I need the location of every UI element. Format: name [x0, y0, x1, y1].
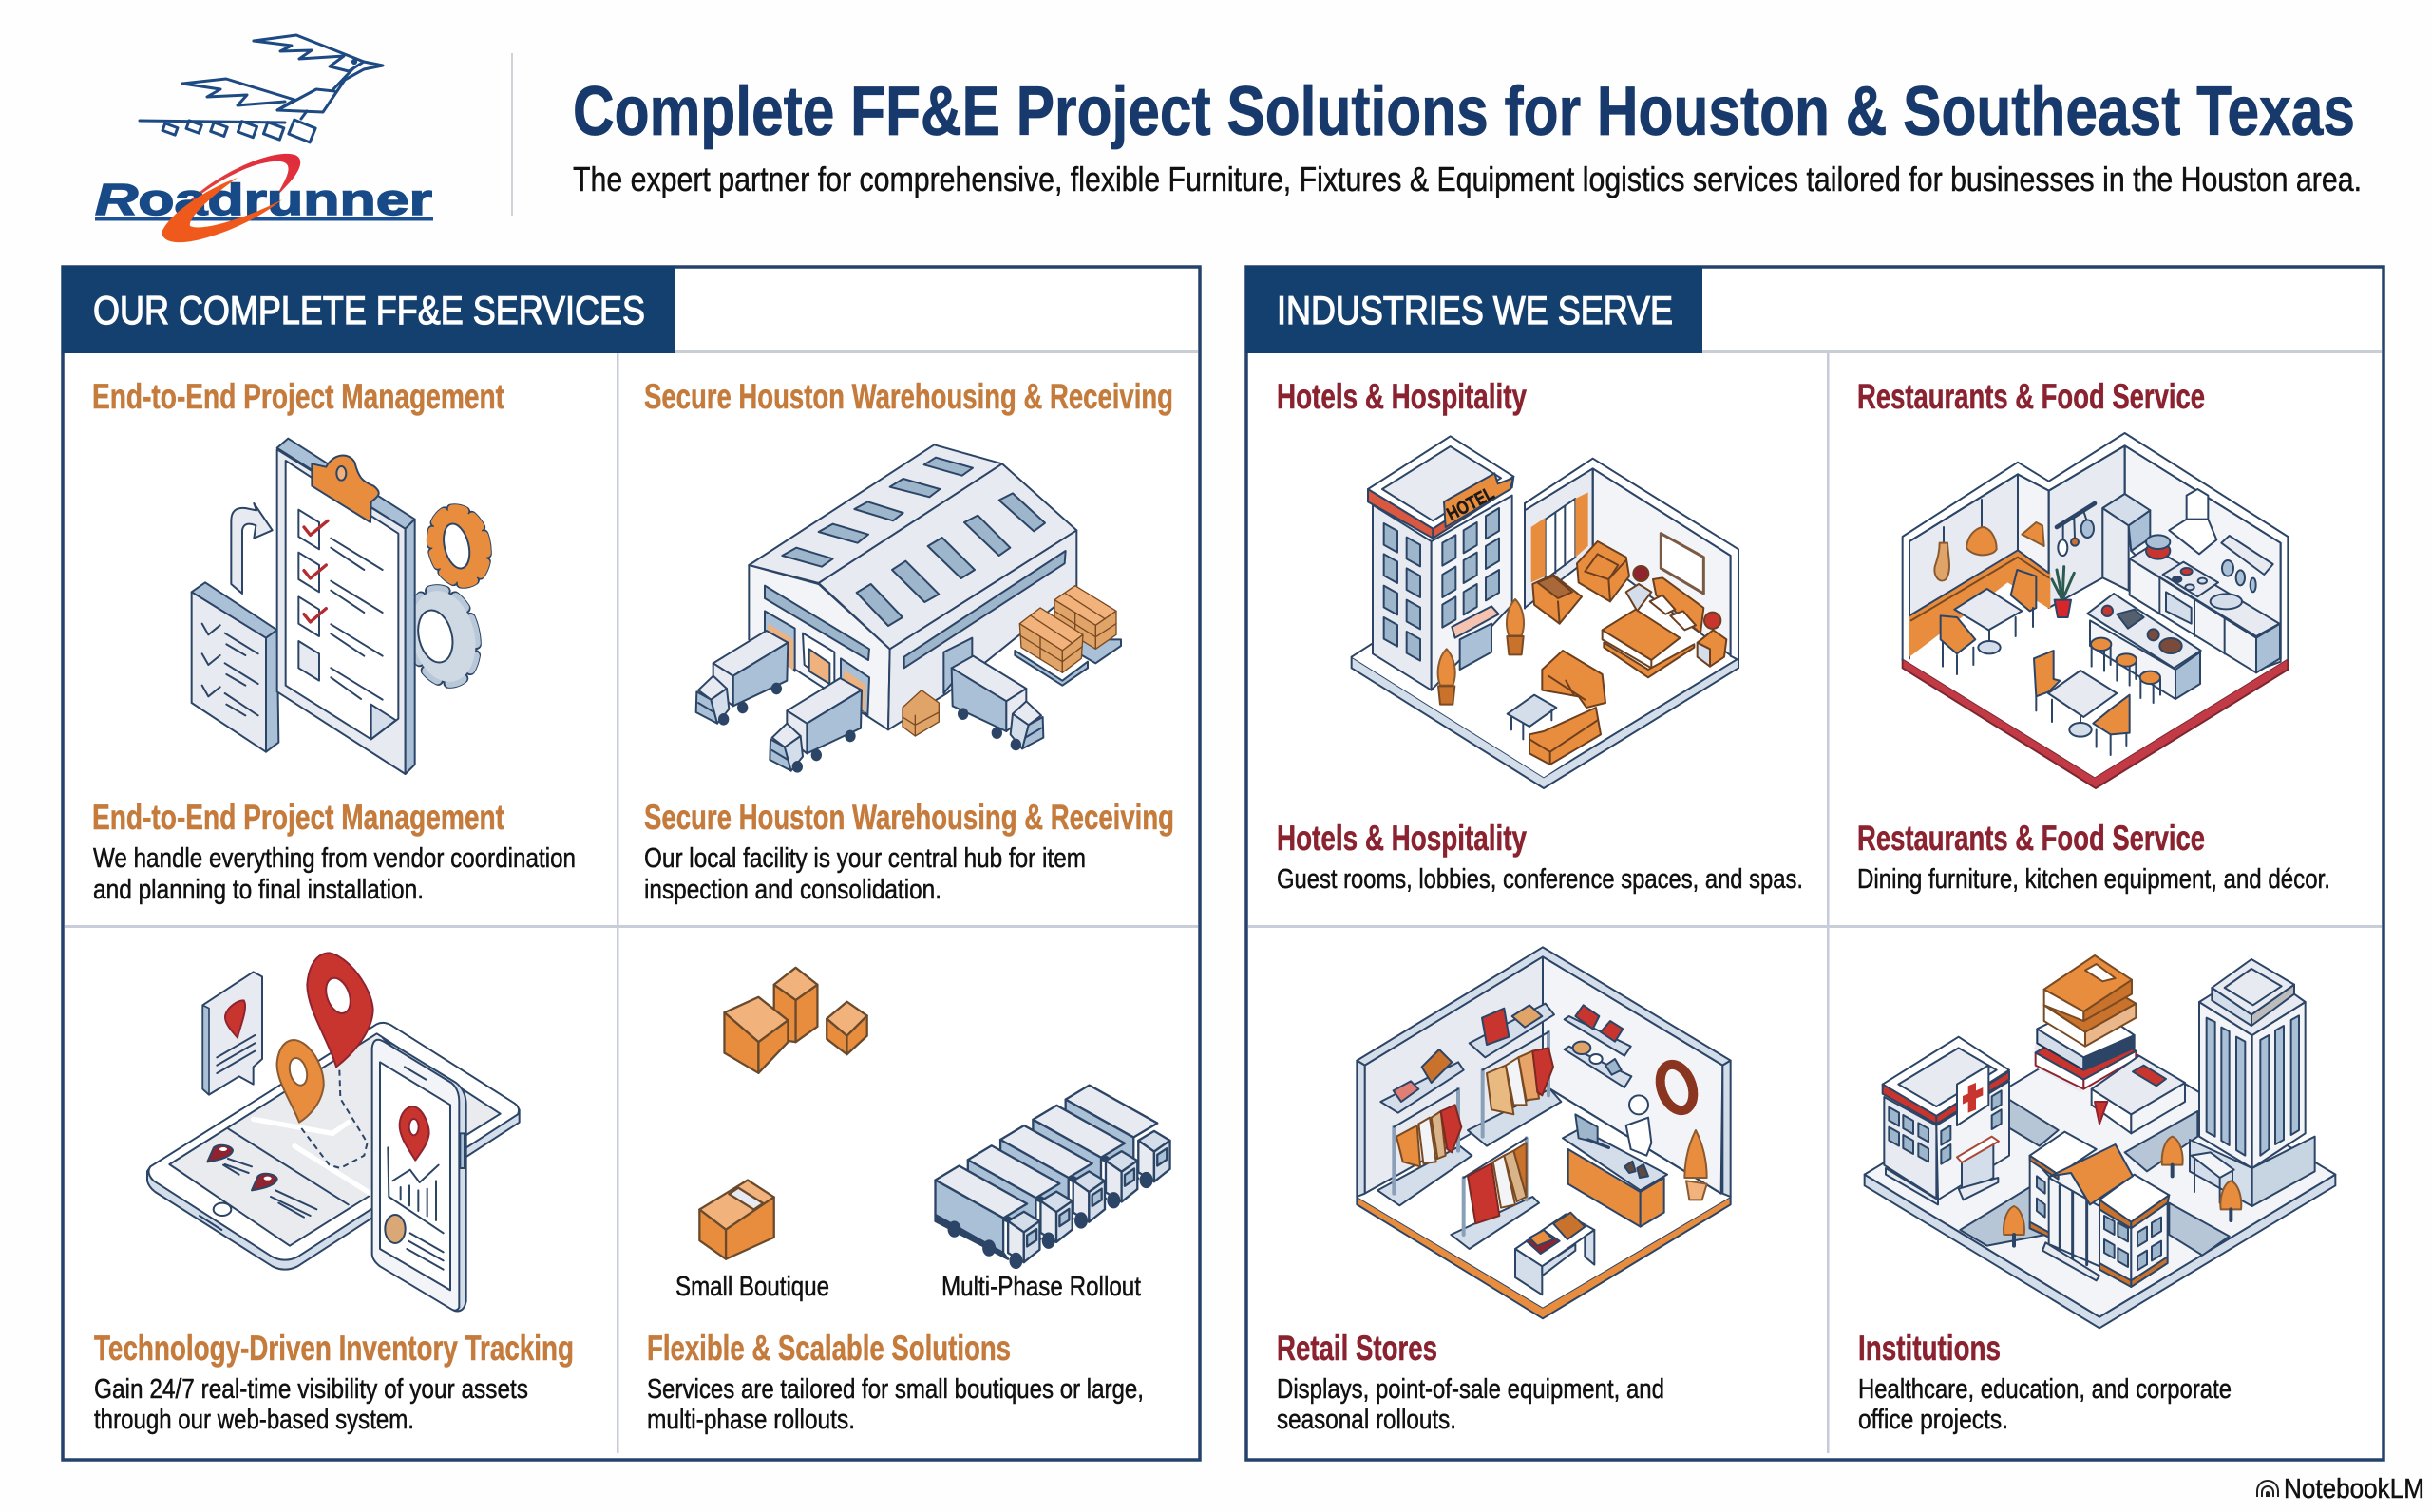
panel header tab [62, 266, 675, 353]
panel: our complete FF&E services [62, 266, 1200, 1460]
description: multi-phase rollouts. [647, 1405, 855, 1435]
industry: institutions [1858, 955, 2335, 1435]
label: hotel sign: HOTEL [1444, 483, 1498, 525]
service: flexible and scalable solutions [647, 968, 1170, 1435]
description [644, 798, 1174, 905]
service: end-to-end project management [92, 377, 576, 905]
NotebookLM watermark [2257, 1474, 2424, 1504]
description: Healthcare, education, and corporate [1858, 1374, 2232, 1405]
label: small boutique: Small Boutique [675, 1272, 829, 1302]
icon: clipboard, checklist and gears [192, 439, 494, 774]
icon: warehouse with trucks [696, 444, 1121, 772]
description: through our web-based system. [94, 1405, 414, 1435]
heading: End-to-End Project Management [92, 377, 504, 416]
label: multi-phase rollout: Multi-Phase Rollout [941, 1272, 1141, 1302]
description: Displays, point-of-sale equipment, and [1277, 1374, 1664, 1405]
description: End-to-End Project Management [92, 798, 504, 837]
description: We handle everything from vendor coordination [93, 843, 576, 874]
logo underline [95, 217, 433, 220]
panel: industries we serve [1245, 266, 2384, 1460]
service: secure Houston warehousing [644, 377, 1174, 905]
description: and planning to final installation. [93, 875, 424, 905]
logo swoosh: red [180, 154, 300, 211]
description: Secure Houston Warehousing & Receiving [644, 798, 1174, 837]
heading: Hotels & Hospitality [1277, 377, 1527, 416]
description: Guest rooms, lobbies, conference spaces, and spas. [1277, 864, 1803, 895]
description: seasonal rollouts. [1277, 1405, 1456, 1435]
icon: tablet, phone and map pins [147, 953, 520, 1311]
heading: Restaurants & Food Service [1857, 377, 2205, 416]
industry: retail stores [1277, 947, 1731, 1435]
description: Hotels & Hospitality [1277, 819, 1527, 858]
icon: boxes, small boutique [699, 968, 867, 1259]
description [1277, 819, 1803, 895]
icon: isometric restaurant [1903, 433, 2288, 788]
description [647, 1329, 1144, 1435]
logo swoosh: orange [162, 178, 282, 242]
icon: roadrunner bird [140, 35, 383, 142]
description: office projects. [1858, 1405, 2008, 1435]
industry: hotels and hospitality [1277, 377, 1803, 895]
icon: NotebookLM mark [2257, 1481, 2278, 1497]
icon: isometric hotel and room [1352, 436, 1738, 788]
description [92, 798, 576, 905]
description: inspection and consolidation. [644, 875, 941, 905]
description [1857, 819, 2330, 895]
description: Technology-Driven Inventory Tracking [94, 1329, 574, 1368]
description: Gain 24/7 real-time visibility of your assets [94, 1374, 528, 1405]
description [1858, 1329, 2232, 1435]
description: Dining furniture, kitchen equipment, and décor. [1857, 864, 2330, 895]
service: technology-driven inventory tracking [94, 953, 574, 1435]
description: Institutions [1858, 1329, 2001, 1368]
industry: restaurants and food service [1857, 377, 2330, 895]
description: Restaurants & Food Service [1857, 819, 2205, 858]
description: Retail Stores [1277, 1329, 1437, 1368]
icon: isometric campus of hospital, school and tower [1865, 955, 2335, 1328]
description: Our local facility is your central hub for item [644, 843, 1086, 874]
description [94, 1329, 574, 1435]
panel header tab: INDUSTRIES WE SERVE [1277, 288, 1673, 332]
panel header tab: OUR COMPLETE FF&E SERVICES [93, 288, 645, 332]
description [1277, 1329, 1664, 1435]
icon: truck fleet, multi-phase rollout [936, 1086, 1170, 1268]
description: Services are tailored for small boutiques or large, [647, 1374, 1144, 1405]
logo wordmark: R oadrunner [95, 175, 432, 224]
icon: isometric retail store [1357, 947, 1731, 1318]
logo: Roadrunner [95, 35, 433, 242]
panel header tab [1245, 266, 1702, 353]
heading: Secure Houston Warehousing & Receiving [644, 377, 1173, 416]
description: Flexible & Scalable Solutions [647, 1329, 1011, 1368]
